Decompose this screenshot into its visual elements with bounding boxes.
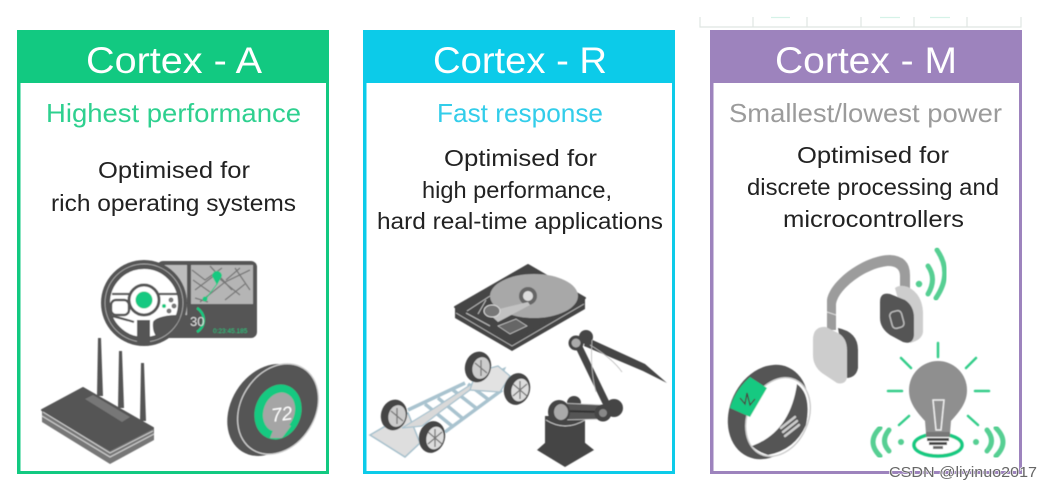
description R: hard real-time applications [377, 208, 663, 234]
subheading: Highest performance: Highest performance [46, 98, 301, 128]
description R [377, 145, 663, 234]
description M [747, 142, 999, 232]
icon: car dashboard with steering wheel: 30 [190, 314, 204, 329]
icon: car dashboard with steering wheel [105, 261, 257, 344]
description M: discrete processing and [747, 174, 999, 200]
icon: smart light bulb [888, 343, 989, 456]
icon: router with antennas [42, 338, 154, 464]
heading: Cortex - R: Cortex - R [433, 40, 607, 81]
heading: Cortex - A: Cortex - A [86, 40, 262, 81]
table fragment at top right [700, 17, 1021, 27]
description M: Optimised for [797, 142, 949, 168]
panel: Cortex-M [710, 30, 1022, 474]
description M: microcontrollers [783, 206, 964, 232]
heading: Cortex - M: Cortex - M [775, 40, 957, 81]
watermark: CSDN @liyinuo2017: CSDN @liyinuo2017 [889, 465, 1037, 481]
panel R frame and header [363, 30, 675, 474]
icon: round thermostat [211, 349, 335, 471]
panel: Cortex-A [17, 30, 335, 474]
icon: headphones [813, 255, 923, 383]
subheading: Fast response: Fast response [437, 98, 603, 128]
icon: car chassis [370, 349, 534, 457]
description R: Optimised for [444, 145, 597, 171]
panel: Cortex-R [363, 30, 675, 474]
icon: hard disk drive [455, 265, 585, 351]
icon: signals from bulb [873, 428, 1003, 456]
icon: car dashboard with steering wheel: 0:23:45.185 [213, 328, 248, 335]
description A [51, 157, 296, 216]
panel A frame and header [17, 30, 329, 474]
description A: Optimised for [98, 157, 250, 183]
icon: round thermostat: 72 [270, 403, 294, 427]
panel M frame and header [710, 30, 1022, 474]
subheading: Smallest/lowest power: Smallest/lowest power [729, 98, 1002, 128]
description R: high performance, [422, 177, 612, 203]
icon: wireless signal from headphones [916, 250, 945, 298]
icon: robot arm [537, 330, 667, 467]
description A: rich operating systems [51, 190, 296, 216]
icon: fitness wristband [713, 352, 823, 472]
